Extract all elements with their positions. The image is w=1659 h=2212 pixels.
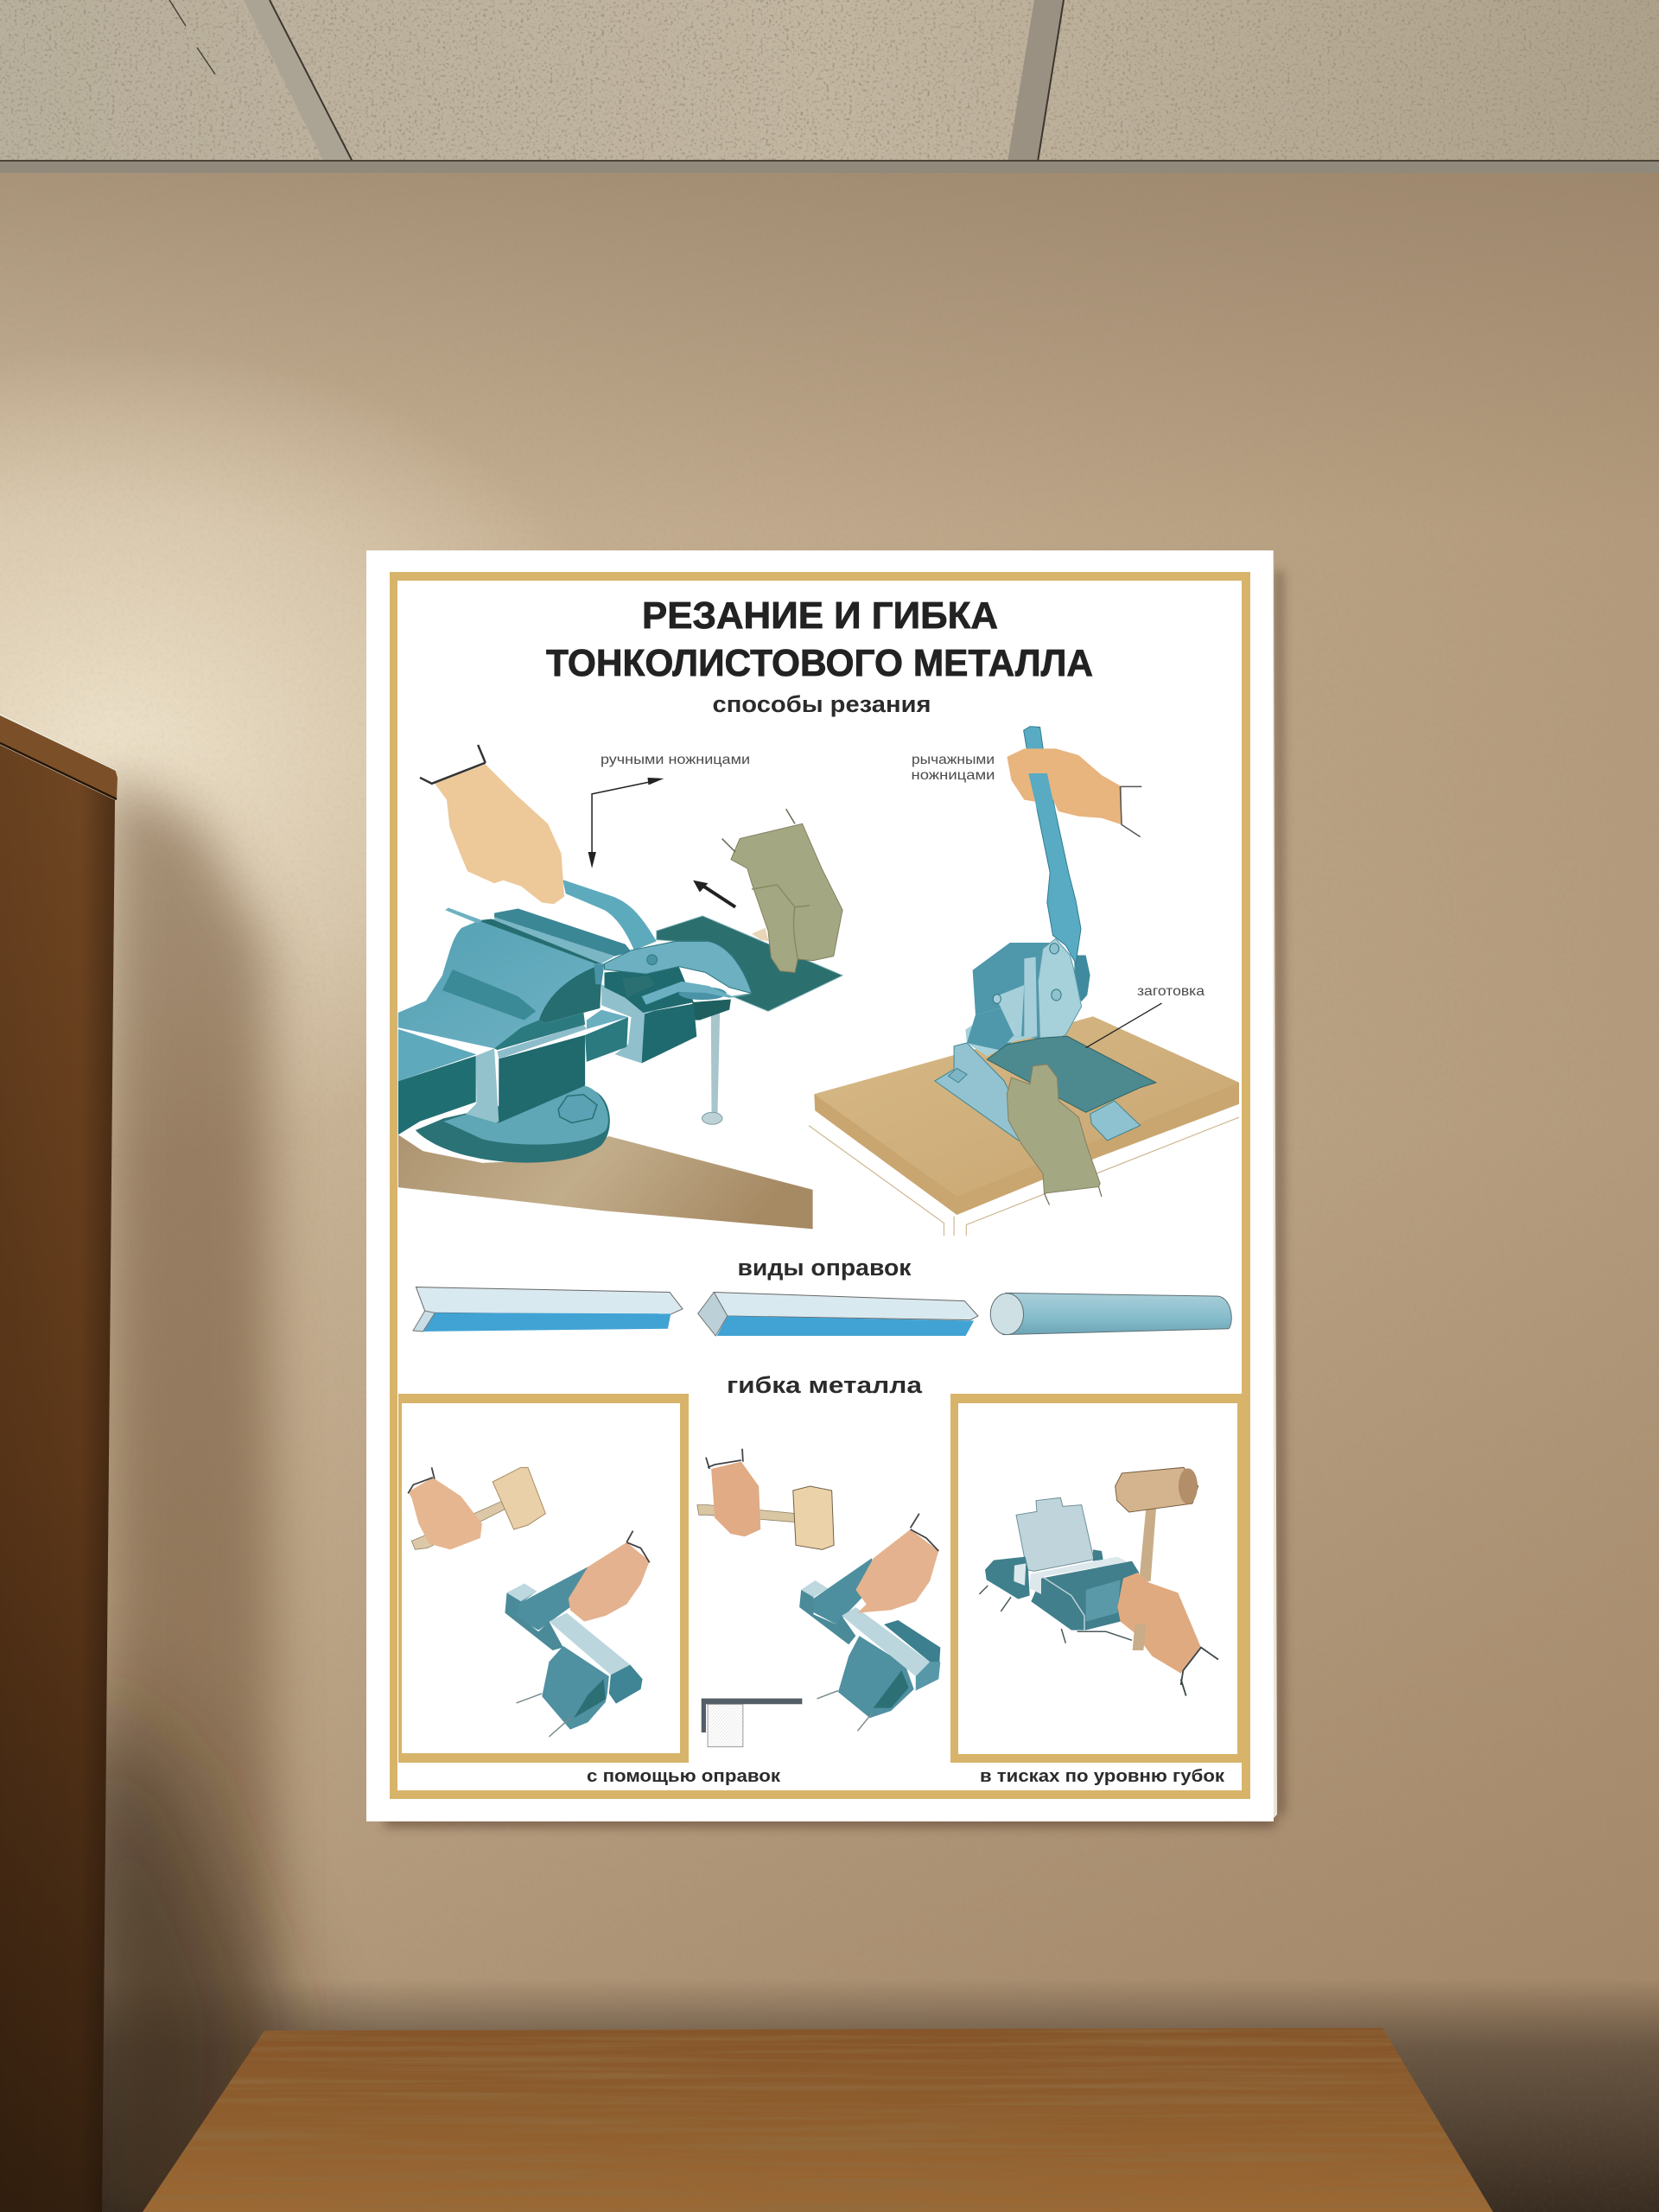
heading: cutting methods: способы резания	[712, 691, 931, 717]
table lines	[809, 1117, 1239, 1236]
vise slide	[398, 1010, 628, 1135]
left gold panel	[398, 1394, 689, 1763]
label: lever shears: ножницами	[911, 768, 995, 783]
shear base	[935, 1023, 1141, 1141]
hand on lever	[1007, 748, 1141, 837]
vise	[505, 1567, 643, 1737]
gold outer frame	[390, 572, 1250, 1799]
callout line	[1086, 1003, 1161, 1048]
heading: mandrel types: виды оправок	[738, 1255, 912, 1281]
hand with mallet	[1117, 1573, 1218, 1696]
illustration: cutting with lever shears	[809, 727, 1239, 1236]
right gold panel	[950, 1394, 1250, 1763]
workbench	[398, 1135, 813, 1229]
mandrel: round	[990, 1293, 1231, 1335]
caption: in vise at jaw level: в тисках по уровню губок	[980, 1767, 1225, 1786]
ceiling	[0, 0, 1659, 173]
shear plate	[967, 943, 1056, 1052]
hand in glove	[722, 809, 842, 973]
mallet	[697, 1486, 834, 1549]
label: workpiece: заготовка	[1137, 984, 1205, 999]
diagram: mandrel section	[702, 1699, 802, 1747]
bending in vise figure	[979, 1467, 1218, 1696]
label: hand shears: ручными ножницами	[601, 753, 750, 767]
bending with mandrel figures	[408, 1449, 940, 1747]
middle figure	[697, 1449, 940, 1731]
vise	[799, 1558, 940, 1731]
mandrel: square	[698, 1292, 978, 1336]
sheet	[1016, 1497, 1094, 1571]
mandrels	[413, 1287, 1231, 1336]
vise jaw	[398, 907, 632, 1050]
hand in glove holding sheet	[1007, 1065, 1102, 1205]
vise screw handle	[702, 1013, 722, 1124]
curved blade	[1038, 938, 1090, 1043]
left figure	[408, 1467, 650, 1737]
vise	[979, 1549, 1139, 1643]
label: lever shears: рычажными	[912, 753, 995, 767]
heading: metal bending: гибка металла	[727, 1372, 923, 1398]
stacked sheets edge	[1270, 550, 1277, 1821]
poster	[366, 550, 1284, 1827]
workpiece sheet	[987, 1036, 1156, 1112]
arrows and label lines	[588, 778, 735, 907]
supporting hand	[569, 1531, 650, 1622]
lever	[1024, 727, 1081, 963]
vise base	[416, 1085, 610, 1163]
title	[546, 594, 1093, 684]
hand with mallet	[408, 1467, 482, 1549]
mandrel: angle	[413, 1287, 683, 1332]
hand with mallet	[706, 1449, 760, 1536]
hand shears	[563, 880, 752, 1013]
poster shadow	[385, 570, 1284, 1827]
hand holding shears	[420, 745, 564, 904]
vise rear box and post	[601, 984, 731, 1064]
title: РЕЗАНИЕ И ГИБКА	[642, 594, 998, 637]
mallet	[411, 1467, 545, 1549]
table	[138, 2026, 1503, 2212]
illustration: cutting with hand shears in a vise	[398, 745, 842, 1229]
wooden board	[814, 1016, 1239, 1215]
caption: with mandrels: с помощью оправок	[587, 1767, 781, 1786]
title: ТОНКОЛИСТОВОГО МЕТАЛЛА	[546, 642, 1093, 684]
wardrobe	[0, 713, 118, 2212]
supporting hand	[855, 1514, 938, 1613]
poster sheet	[366, 550, 1274, 1821]
metal sheet	[657, 916, 842, 1011]
label: lever shears	[911, 753, 995, 783]
mallet	[1116, 1467, 1198, 1581]
